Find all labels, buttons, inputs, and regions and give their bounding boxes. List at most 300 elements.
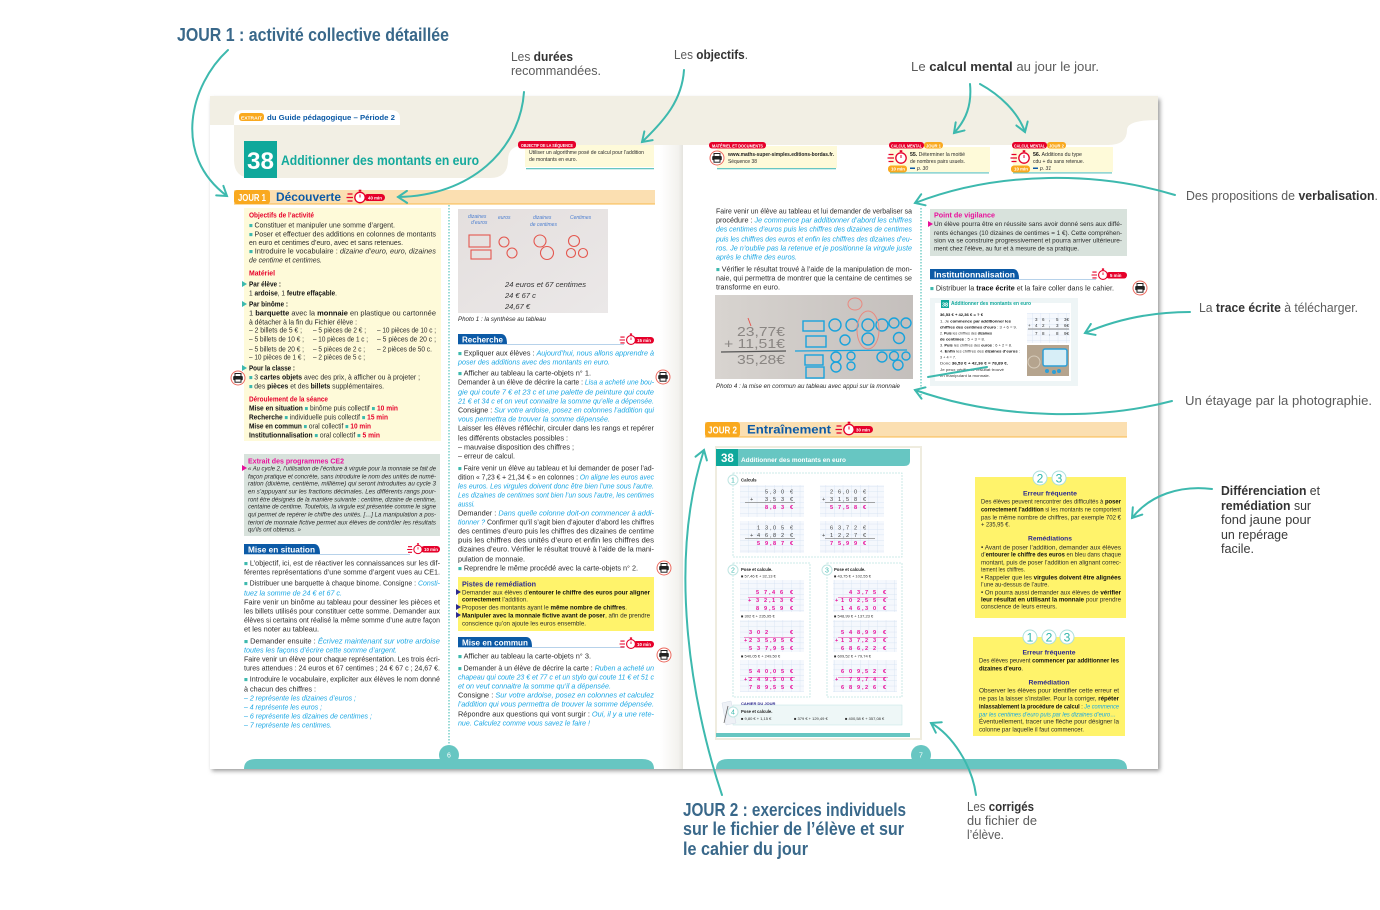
text: mise en situation: ■ Distribuer une barquette à chaque binome. Consigne : Consti-: [244, 578, 440, 588]
exercice 3: ■ 548,99 € + 137,23 €: [834, 614, 874, 618]
panel: objectifs, matériel, déroulement: 1 barquette avec la monnaie en plastique ou cartonnée: [249, 308, 436, 318]
exercice 3: 548,99€: [841, 630, 887, 636]
calcul mental jour 2: p. 31: [1039, 166, 1051, 172]
panel: objectifs, matériel, déroulement: ■ Introduire le vocabulaire : dizaine d’euro, euro, dizaines: [249, 246, 436, 256]
exercice 3: 686,22€: [841, 646, 887, 652]
exercice 3: Pose et calcule.: [834, 567, 865, 572]
exercice 2: 540,05€: [749, 669, 794, 675]
icon: print institutionnalisation: [1133, 281, 1147, 295]
calcul mental jour 2: CALCUL MENTAL: [1014, 143, 1045, 148]
text: mise en situation: tuez la somme de 24 € et 67 c.: [244, 588, 342, 598]
footer left with page number: [244, 745, 654, 769]
text: mise en situation: toutes les façons d’écrire cette somme d’argent.: [244, 646, 397, 654]
panel: différenciation 1 2 3: 3: [1064, 630, 1071, 644]
panel: différenciation 2 3: • On pourra aussi demander aux élèves de vérifier: [981, 590, 1122, 596]
annotation: jour 2: le cahier du jour: [683, 839, 808, 859]
photo 1: synthèse au tableau: d’euros: [471, 220, 488, 226]
objectif de la séquence: OBJECTIF DE LA SÉQUENCE: [521, 141, 573, 148]
panel: fichier de l'élève: [716, 447, 921, 739]
panel: trace écrite: 4. Enfin les chiffres des dizaines d’euros :: [940, 350, 1020, 354]
text: verbalisation: après le chiffre des euros.: [716, 252, 797, 262]
panel: différenciation 2 3: Erreur fréquente: [1023, 490, 1078, 498]
panel: point de vigilance: sion va se construire progressivement et pourra arriver ultérieure-: [934, 238, 1122, 244]
cahier du jour: 4: [731, 710, 735, 716]
panel: différenciation 2 3: correctement l’addition si les montants ne comportent: [981, 506, 1121, 514]
arrows: calcul mental: [954, 84, 1025, 133]
annotation: verbalisation: Des propositions de verbalisation.: [1186, 189, 1378, 203]
annotation: trace écrite: La trace écrite à télécharger.: [1199, 301, 1358, 315]
panel: différenciation 1 2 3: 2: [1046, 630, 1053, 644]
annotation: différenciation: un repérage: [1221, 528, 1288, 542]
text: recherche: vous permettra de trouver la somme dépensée.: [458, 414, 610, 424]
exercice 3: ■ 609,52 € + 79,74 €: [834, 654, 872, 658]
caption photo 4: Photo 4 : la mise en commun au tableau avec appui sur la monnaie: [716, 383, 900, 390]
panel: pistes de remédiation: Pistes de remédiation: [462, 580, 536, 588]
panel: objectifs, matériel, déroulement: ■ des pièces et des billets supplémentaires.: [249, 382, 384, 390]
panel: objectifs, matériel, déroulement: Par binôme :: [249, 300, 288, 308]
text: mise en commun: l’addition qui vous permettra de trouver la somme dépensée.: [458, 700, 654, 708]
cahier du jour: CAHIER DU JOUR: [741, 701, 776, 706]
panel: extrait des programmes: en s’appuyant sur les fractions décimales. Les différents rangs pour-: [248, 488, 436, 496]
jour 2 band: [705, 422, 1127, 438]
text: verbalisation: Faire venir un élève au tableau et lui demander de verbaliser sa: [716, 206, 913, 216]
panel: objectifs, matériel, déroulement: Mise en situation ■ binôme puis collectif ■ 10 min: [249, 404, 398, 412]
panel: objectifs, matériel, déroulement: ■ Constituer et manipuler une somme d’argent.: [249, 220, 395, 230]
exercice 3: +102,55€: [835, 598, 887, 604]
exercice 3: 609,52€: [841, 669, 887, 675]
exercice 1: +31,58€: [822, 497, 867, 503]
panel: objectifs, matériel, déroulement: ■ Poser et effectuer des additions en colonnes de montants: [249, 230, 436, 238]
text: mise en commun: chapeau qui coute 23 € et 77 c et un stylo qui coute 11 € et 51 c: [458, 672, 654, 682]
text: verbalisation: puis les chiffres des euros et enfin les chiffres des dizaines d’eu-: [715, 234, 912, 244]
photo 1: synthèse au tableau: 24,67 €: [504, 302, 531, 311]
text: mise en commun: ■ Demander à un élève de décrire la carte : Ruben a acheté un: [458, 664, 654, 672]
text: mise en situation: – 2 représente les dizaines d’euros ;: [243, 694, 356, 702]
panel: point de vigilance: ment chez l’élève, au fur et à mesure de sa pratique.: [934, 246, 1079, 252]
panel: objectifs, matériel, déroulement: – 2 pièces de 50 c.: [377, 344, 432, 354]
matériel et documents: www.maths-super-simples.editions-bordas.fr.: [727, 152, 835, 158]
panel: pistes de remédiation: Proposer des montants ayant le même nombre de chiffres.: [462, 604, 627, 612]
panel: point de vigilance: rents échanges (10 dizaines de centimes = 1 €). Cette compréhen-: [934, 230, 1122, 237]
panel: trace écrite: Je peux vérifier le résultat trouvé: [940, 368, 1004, 372]
panel: extrait des programmes: façon pratique et concrète, sans introduire le nom des unités de numé-: [248, 474, 436, 480]
text: verbalisation: ■ Vérifier le résultat trouvé à l’aide de la manipulation de mon-: [716, 264, 913, 274]
text: mise en situation: – 6 représente les dizaines de centimes ;: [243, 712, 372, 720]
jour 1 band: JOUR 1: [238, 192, 266, 204]
annotation: corrigés: [967, 800, 1037, 842]
panel: objectifs, matériel, déroulement: de centime et centimes.: [249, 256, 322, 264]
text: verbalisation: des centimes d’euros puis les chiffres des dizaines de centimes: [716, 224, 912, 234]
text: recherche: – mauvaise disposition des chiffres ;: [458, 442, 574, 452]
text: trace écrite: ■ Distribuer la trace écrite et la faire coller dans le cahier.: [930, 284, 1114, 292]
annotation: différenciation: [1221, 484, 1321, 556]
panel: différenciation 2 3: tement les chiffres.: [981, 566, 1025, 574]
photo 1: synthèse au tableau: 24 euros et 67 centimes: [504, 280, 586, 289]
header: extrait: du Guide pédagogique – Période 2: [267, 113, 395, 122]
panel: différenciation 1 2 3: Des élèves peuvent commencer par additionner les: [979, 658, 1119, 664]
text: recherche: ■ Reprendre le même procédé avec la carte-objets n° 2.: [458, 564, 638, 572]
exercice 1: +3,53€: [750, 497, 794, 503]
calcul mental jour 2: 56. Additions du type: [1033, 152, 1082, 158]
text: mise en situation: Faire venir un élève pour chaque représentation. Les trois écri-: [244, 654, 441, 664]
panel: différenciation 2 3: l’une au-dessus de l’autre.: [981, 582, 1049, 588]
text: mise en commun: Consigne : Sur votre ardoise, posez en colonnes et calculez: [458, 690, 654, 700]
text: mise en situation: férentes représentations d’une somme d’argent vues au CE1.: [244, 568, 440, 576]
text: mise en situation: les billets utilisés pour constituer cette somme. Demander aux: [244, 606, 440, 616]
panel: différenciation 2 3: conscience de leurs erreurs.: [981, 604, 1057, 610]
exercice 1: 5,30€: [765, 490, 794, 496]
cahier du jour: Pose et calcule.: [741, 709, 772, 714]
calcul mental jour 1: [888, 142, 990, 174]
text: recherche: gie qui coute 7 € et 23 c et une palette de peinture qui coute: [458, 388, 654, 396]
panel: trace écrite: Additionner des montants en euro: [951, 301, 1031, 307]
exercice 1: 75,99€: [830, 541, 867, 547]
panel: objectifs, matériel, déroulement: – 10 pièces de 10 c ;: [377, 326, 436, 334]
panel: pistes de remédiation: Demander aux élèves d’entourer le chiffre des euros pour aligner: [462, 590, 651, 596]
text: recherche: 21 € et 34 c et on veut connaitre la somme qu’elle a dépensée.: [457, 396, 654, 406]
exercice 2: Pose et calcule.: [741, 567, 772, 572]
panel: objectifs, matériel, déroulement: Recherche ■ individuelle puis collectif ■ 15 min: [249, 412, 388, 422]
exercice 2: ■ 57,46 € + 32,13 €: [741, 574, 777, 578]
calcul mental jour 1: de nombres pairs usuels.: [910, 159, 965, 165]
panel: différenciation 2 3: 2: [1037, 472, 1044, 486]
objectif de la séquence: Utiliser un algorithme posé de calcul pour l’addition: [529, 150, 644, 156]
panel: objectifs, matériel, déroulement: – 5 pièces de 2 € ;: [313, 326, 366, 334]
jour 1 band: [234, 190, 655, 204]
text: mise en commun: Répondre aux questions qui vont surgir : Oui, il y a une rete-: [458, 710, 655, 718]
annotation: corrigés: Les corrigés: [967, 800, 1034, 814]
text: recherche: ■ Afficher au tableau la carte-objets n° 1.: [458, 368, 591, 378]
icon: print recherche 1: [656, 370, 670, 384]
exercice 2: 789,55€: [749, 685, 794, 691]
panel: objectifs, matériel, déroulement: Objectifs de l’activité: [249, 210, 314, 220]
photo 1: synthèse au tableau: [458, 209, 608, 313]
exercice 2: ■ 302 € + 235,95 €: [741, 614, 775, 618]
panel: différenciation 2 3: Remédiations: [1028, 536, 1073, 542]
photo 4: mise en commun: 35,28€: [737, 353, 785, 367]
exercice 2: +235,95€: [744, 638, 794, 644]
objectif de la séquence: de montants en euro.: [529, 157, 577, 163]
annotation: jour 2: sur le fichier de l’élève et sur: [683, 819, 904, 839]
text: verbalisation: ros. Je n’oublie pas la retenue et je positionne la virgule juste: [716, 244, 912, 252]
panel: trace écrite: 2. Puis les chiffres des dizaines: [940, 332, 992, 336]
panel: différenciation 2 3: d’entourer le chiffre des euros en bleu dans chaque: [981, 552, 1121, 558]
panel: pistes de remédiation: correctement l’addition.: [462, 596, 528, 604]
text: mise en commun: et on veut connaitre la somme qu’il a dépensée.: [458, 682, 611, 690]
exercice 2: 302€: [749, 630, 794, 636]
panel: différenciation 2 3: Des élèves peuvent rencontrer des difficultés à poser: [981, 498, 1122, 506]
exercice 1: +46,82€: [750, 533, 794, 539]
text: recherche: – erreur de calcul.: [458, 452, 515, 460]
text: recherche: pulation de monnaie.: [458, 554, 525, 564]
exercice 2: +32,13€: [748, 598, 794, 604]
panel: objectifs, matériel, déroulement: – 5 pièces de 2 c ;: [313, 344, 365, 354]
panel: différenciation 2 3: leur résultat en utilisant la monnaie pour prendre: [981, 596, 1121, 604]
exercice 3: [822, 563, 902, 697]
heading: recherche: Recherche: [462, 334, 503, 344]
cahier du jour: ■ 400,58 € + 357,08 €: [845, 716, 885, 721]
heading: mise en situation: 10 min: [424, 547, 438, 552]
panel: extrait des programmes: teriori de monnaie fictive permet aux élèves de contrôler les résultats: [248, 520, 437, 526]
text: mise en situation: ■ Demander ensuite : Écrivez maintenant sur votre ardoise: [244, 636, 440, 646]
panel: différenciation 1 2 3: inlassablement la procédure de calcul : Je commence: [979, 704, 1119, 710]
exercice 3: +137,23€: [835, 638, 887, 644]
exercice 1: 1: [731, 478, 735, 484]
photo 4: mise en commun: [715, 295, 913, 379]
photo 1: synthèse au tableau: euros: [498, 215, 511, 221]
text: recherche: dition « 7,23 € + 21,34 € » en colonnes : On aligne les euros avec: [458, 472, 654, 482]
photo 4: mise en commun: 23,77€: [737, 325, 785, 339]
panel: trace écrite: +42,36€: [1028, 323, 1070, 328]
text: mise en situation: – 4 représente les euros ;: [243, 702, 322, 712]
icon: print mise en commun: [657, 648, 671, 662]
objectif de la séquence: [518, 141, 654, 169]
jour 1 band: Découverte: [276, 190, 341, 204]
panel: différenciation 1 2 3: dizaines d’euro.: [979, 666, 1023, 672]
panel: objectifs, matériel, déroulement: – 5 billets de 20 € ;: [249, 344, 304, 354]
photo 1: synthèse au tableau: Centimes: [570, 215, 592, 221]
icon: print recherche 2: [657, 561, 671, 575]
exercice 2: 2: [731, 568, 735, 574]
panel: pistes de remédiation: conscience qu’on ajoute les euros ensemble.: [462, 620, 586, 628]
text: recherche: poser des additions avec des montants en euro.: [457, 358, 610, 366]
panel: point de vigilance: Point de vigilance: [934, 210, 995, 220]
panel: différenciation 1 2 3: [973, 630, 1125, 736]
text: recherche: Laisser les élèves réfléchir, circuler dans les rangs et repérer: [458, 424, 655, 432]
text: mise en situation: et les noter au tableau.: [244, 624, 319, 634]
text: recherche: puis les chiffres des unités d’euro et enfin les chiffres des: [458, 536, 654, 544]
cahier du jour: [722, 701, 902, 725]
annotation: différenciation: remédiation sur: [1221, 499, 1311, 513]
panel: point de vigilance: [928, 209, 1127, 256]
exercice 1: 63,72€: [830, 526, 867, 532]
cahier du jour: ■ 379 € + 129,49 €: [794, 716, 828, 721]
exercice 2: 57,46€: [756, 590, 794, 596]
text: mise en situation: élèves si certains ont réalisé la même somme d’une autre façon: [244, 616, 440, 624]
panel: trace écrite: 78,89€: [1035, 331, 1070, 336]
annotation: jour 2: [683, 800, 906, 859]
heading: institutionnalisation: Institutionnalisation: [934, 270, 1015, 280]
calcul mental jour 2: [1010, 142, 1113, 174]
photo 4: mise en commun: + 11,51€: [724, 337, 785, 351]
panel: objectifs, matériel, déroulement: – 10 pièces de 1 € ;: [249, 352, 305, 362]
annotation: différenciation: Différenciation et: [1221, 484, 1321, 498]
panel: extrait des programmes: qu’ils ont obtenus. »: [248, 526, 301, 534]
panel: différenciation 2 3: montant, puis de poser l’addition en alignant correc-: [981, 560, 1121, 566]
page spread: [210, 96, 1160, 771]
exercice 2: [728, 563, 810, 697]
text: mise en situation: [243, 558, 441, 730]
calcul mental jour 1: p. 30: [916, 166, 928, 172]
panel: trace écrite: 36,53€: [1035, 317, 1070, 322]
panel: différenciation 1 2 3: 1: [1027, 630, 1034, 644]
panel: extrait des programmes: Extrait des programmes CE2: [248, 456, 344, 466]
text: verbalisation: naie, qui permettra de montrer que la centaine de centimes se: [716, 274, 912, 282]
panel: trace écrite: 3 + 4 = 7.: [940, 356, 956, 360]
panel: objectifs, matériel, déroulement: Par élève :: [249, 280, 281, 288]
panel: différenciation 1 2 3: colonne par laquelle il faut commencer.: [979, 726, 1084, 734]
caption photo 1: Photo 1 : la synthèse au tableau: [458, 316, 546, 323]
heading: mise en situation: Mise en situation: [248, 544, 315, 554]
heading: mise en situation: [244, 543, 440, 555]
arrow: durées: [398, 92, 524, 197]
panel: trace écrite: [930, 298, 1078, 386]
panel: extrait des programmes: [242, 454, 440, 536]
text: recherche: Les dizaines de centimes sont bien l’un sous l’autre, les centimes: [458, 490, 654, 500]
annotation: photographie: Un étayage par la photographie.: [1185, 394, 1372, 408]
text: mise en situation: ■ Introduire le vocabulaire, expliciter aux élèves le nom donné: [244, 674, 440, 684]
annotation: différenciation: facile.: [1221, 542, 1254, 556]
panel: trace écrite: de centimes : 5 + 3 = 8.: [940, 338, 985, 342]
arrow: corrigés: [931, 723, 976, 795]
panel: objectifs, matériel, déroulement: – 2 billets de 5 € ;: [249, 326, 302, 334]
exercice 1: 13,05€: [757, 526, 794, 532]
panel: différenciation 1 2 3: Éventuellement, tracer une flèche pour désigner la: [979, 716, 1119, 726]
panel: trace écrite: en manipulant la monnaie.: [940, 374, 990, 378]
panel: différenciation 2 3: • Rappeler que les virgules doivent être alignées: [981, 574, 1121, 582]
text: mise en commun: nue. Calculez comme vous savez le faire !: [458, 718, 590, 728]
calcul mental jour 1: CALCUL MENTAL: [891, 143, 922, 148]
icon: print left 1: [231, 371, 245, 385]
text: mise en situation: ■ L’objectif, ici, est de réactiver les connaissances sur les dif-: [244, 558, 441, 568]
annotation: différenciation: fond jaune pour: [1221, 513, 1311, 527]
text: recherche: aussi.: [458, 500, 475, 508]
panel: objectifs, matériel, déroulement: 1 ardoise, 1 feutre effaçable.: [249, 288, 337, 298]
jour 2 band: Entraînement: [747, 422, 831, 436]
panel: objectifs, matériel, déroulement: [242, 208, 441, 441]
arrow: trace écrite: [1085, 312, 1190, 333]
panel: différenciation 2 3: 3: [1056, 472, 1063, 486]
text: recherche: des centimes d’euro puis les chiffres des dizaines de centime: [458, 526, 654, 536]
photo 1: synthèse au tableau: dizaines: [533, 215, 552, 221]
text: recherche: les différents obstacles possibles :: [458, 434, 568, 442]
panel: trace écrite: 38: [942, 302, 948, 308]
calcul mental jour 2: 10 min: [1014, 167, 1028, 172]
panel: objectifs, matériel, déroulement: Institutionnalisation ■ oral collectif ■ 5 min: [249, 430, 380, 440]
text: mise en situation: Faire venir un binôme au tableau pour dessiner les pièces et: [244, 598, 440, 606]
panel: différenciation 1 2 3: par les centimes d’euro puis par les dizaines d’euro…: [978, 712, 1116, 718]
matériel et documents: Séquence 38: [728, 159, 757, 165]
panel: objectifs, matériel, déroulement: Déroulement de la séance: [249, 394, 328, 404]
text: recherche: Consigne : Sur votre ardoise, posez en colonnes l’addition qui: [458, 406, 654, 414]
arrows: photographie: [915, 367, 1172, 414]
exercice 1: 26,00€: [830, 490, 867, 496]
calcul mental jour 1: JOUR 1: [926, 143, 941, 148]
text: recherche: ■ Expliquer aux élèves : Aujourd’hui, nous allons apprendre à: [458, 348, 654, 358]
annotation: durées: [511, 50, 601, 78]
exercice 1: Calculs: [741, 478, 757, 482]
text: recherche: tionner ? Confirmer qu’il s’agit bien d’ajouter d’abord les chiffres: [458, 518, 654, 526]
panel: extrait des programmes: ront être désignés de la manière suivante : centime, dizaine de centime,: [248, 496, 436, 504]
lesson title: [244, 141, 479, 178]
panel: objectifs, matériel, déroulement: – 5 pièces de 20 c ;: [377, 334, 436, 344]
exercice 3: ■ 43,75 € + 102,55 €: [834, 574, 872, 578]
panel: différenciation 2 3: • Avant de poser l’addition, demander aux élèves: [981, 544, 1121, 552]
jour 2 band: JOUR 2: [708, 424, 737, 436]
text: recherche: ■ Faire venir un élève au tableau et lui demander de poser l’ad-: [458, 464, 655, 472]
panel: différenciation 1 2 3: ne pas la laisser s’installer. Pour la corriger, répéter: [979, 696, 1120, 702]
panel: trace écrite: 1. Je commence par additionner les: [940, 320, 1011, 324]
text: recherche: dizaines d’euro. Vérifier le résultat trouvé à l’aide de la mani-: [458, 544, 655, 554]
exercice 2: +249,50€: [744, 677, 794, 683]
panel: trace écrite: 36,53 € + 42,36 € = ? €: [940, 313, 984, 317]
panel: différenciation 1 2 3: Erreur fréquente: [1022, 650, 1076, 656]
footer left with page number: 6: [447, 752, 451, 760]
text: verbalisation: [715, 206, 913, 292]
panel: objectifs, matériel, déroulement: Pour la classe :: [249, 364, 295, 372]
panel: fichier de l'élève: Additionner des montants en euro: [741, 457, 846, 464]
heading: recherche: 15 min: [637, 338, 651, 343]
exercice 1: 59,87€: [757, 541, 794, 547]
exercice 3: 3: [825, 568, 829, 574]
annotation: durées: Les durées: [511, 50, 573, 64]
panel: extrait des programmes: « Au cycle 2, l’utilisation de l’écriture à virgule pour la monnaie se fait de: [248, 466, 436, 472]
annotation: objectifs: Les objectifs.: [674, 48, 748, 62]
jour 1 band: 40 min: [368, 196, 382, 200]
heading: mise en commun: [458, 637, 654, 648]
cahier du jour: ■ 9,80 € + 1,15 €: [741, 716, 772, 721]
panel: extrait des programmes: ration (dixième, centième, millième) qui seront introduites au cycle 3: [248, 480, 436, 488]
exercice 2: 89,59€: [756, 606, 794, 612]
calcul mental jour 1: 10 min: [891, 167, 905, 172]
header: extrait: EXTRAIT: [241, 116, 262, 120]
panel: objectifs, matériel, déroulement: Mise en commun ■ oral collectif ■ 10 min: [249, 422, 371, 430]
panel: objectifs, matériel, déroulement: – 5 billets de 10 € ;: [249, 334, 304, 344]
photo 1: synthèse au tableau: de centimes: [530, 222, 557, 228]
calcul mental jour 2: cdu + du sans retenue.: [1033, 159, 1084, 165]
exercice 3: 43,75€: [849, 590, 887, 596]
annotation: corrigés: l’élève.: [967, 828, 1004, 842]
panel: différenciation 1 2 3: Observer les élèves pour identifier cette erreur et: [979, 688, 1119, 694]
calcul mental jour 1: 55. Déterminer la moitié: [910, 152, 965, 158]
footer right with page number: [716, 745, 1127, 769]
heading: recherche: [458, 333, 654, 345]
matériel et documents: [709, 141, 837, 169]
panel: objectifs, matériel, déroulement: en euro et centimes d’euro, avec et sans retenues.: [249, 238, 403, 247]
text: mise en situation: à chacun des chiffres :: [244, 684, 316, 694]
lesson title: Additionner des montants en euro: [281, 152, 479, 168]
exercice 1: 57,58€: [830, 505, 867, 511]
annotation: jour 2: JOUR 2 : exercices individuels: [683, 800, 906, 820]
exercice 3: +79,74€: [835, 677, 887, 683]
panel: différenciation 2 3: [975, 471, 1126, 618]
panel: objectifs, matériel, déroulement: Matériel: [249, 268, 275, 278]
heading: mise en commun: 10 min: [637, 642, 651, 647]
text: mise en situation: tures attendues : 24 euros et 67 centimes ; 24 € 67 c ; 24,67 €.: [244, 664, 440, 672]
photo 1: synthèse au tableau: dizaines: [468, 214, 487, 220]
annotation: durées: recommandées.: [511, 64, 601, 78]
annotation: corrigés: du fichier de: [967, 814, 1037, 828]
arrow: jour 1: [192, 50, 228, 196]
exercice 1: 8,83€: [765, 505, 794, 511]
panel: pistes de remédiation: Manipuler avec la monnaie fictive avant de poser, afin de prendre: [462, 612, 650, 620]
text: verbalisation: procédure : Je commence par additionner d’abord les chiffres: [716, 216, 912, 224]
text: recherche: les euros. Les virgules doivent donc être bien l’une sous l’autre.: [458, 482, 654, 490]
panel: fichier de l'élève: 38: [721, 453, 734, 465]
annotation: calcul mental: Le calcul mental au jour le jour.: [911, 60, 1099, 74]
panel: objectifs, matériel, déroulement: à détacher à la fin du Fichier élève :: [249, 318, 357, 326]
panel: extrait des programmes: centaine de centime. Toutefois, la virgule est présentée comme le signe: [248, 504, 436, 510]
text: recherche: [457, 348, 655, 572]
text: mise en commun: ■ Afficher au tableau la carte-objets n° 3.: [458, 652, 591, 660]
heading: mise en commun: Mise en commun: [462, 638, 528, 648]
panel: objectifs, matériel, déroulement: ■ 3 cartes objets avec des prix, à afficher ou à projeter ;: [249, 372, 420, 382]
text: verbalisation: transforme en euro.: [716, 282, 780, 292]
calcul mental jour 2: JOUR 2: [1049, 143, 1064, 148]
arrow: objectifs: [642, 70, 684, 142]
heading: institutionnalisation: 5 min: [1110, 273, 1122, 278]
panel: pistes de remédiation: [456, 577, 654, 631]
